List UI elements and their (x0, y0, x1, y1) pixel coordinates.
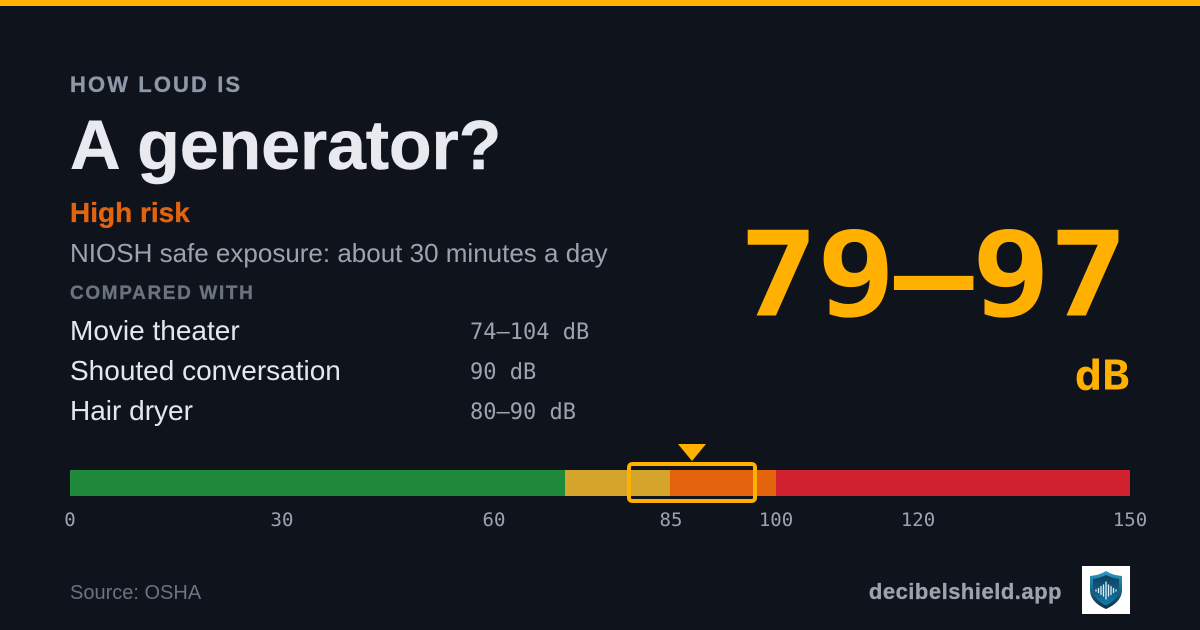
decibel scale bar (70, 470, 1130, 496)
marker triangle (678, 444, 706, 461)
scale tick labels (64, 509, 1147, 531)
source: Source: OSHA (70, 582, 201, 604)
icon: shield logo (1082, 566, 1130, 614)
risk label: High risk (70, 197, 190, 228)
comparison: movie theater: Movie theater (70, 315, 240, 346)
big decibel value: 79–97 (739, 207, 1126, 344)
eyebrow heading: HOW LOUD IS (70, 72, 242, 97)
comparison heading: COMPARED WITH (70, 283, 254, 304)
comparison: hair dryer: 80–90 dB (470, 400, 576, 425)
comparison: hair dryer (70, 395, 576, 426)
comparison: movie theater (70, 315, 589, 346)
scale tick labels: 150 (1113, 509, 1147, 531)
site name: decibelshield.app (869, 579, 1062, 604)
comparison: shouted conversation: 90 dB (470, 360, 536, 385)
scale tick labels: 100 (759, 509, 793, 531)
comparison: shouted conversation (70, 355, 536, 386)
scale tick labels: 60 (483, 509, 505, 531)
scale tick labels: 85 (660, 509, 682, 531)
exposure note: NIOSH safe exposure: about 30 minutes a day (70, 238, 608, 268)
scale tick labels: 30 (271, 509, 293, 531)
comparison: hair dryer: Hair dryer (70, 395, 193, 426)
comparison: shouted conversation: Shouted conversation (70, 355, 341, 386)
scale tick labels: 120 (901, 509, 935, 531)
range bracket (627, 462, 757, 503)
comparison: movie theater: 74–104 dB (470, 320, 589, 345)
decibel unit: dB (1075, 351, 1130, 399)
title: A generator? (70, 106, 501, 184)
top accent bar (0, 0, 1200, 6)
scale tick labels: 0 (64, 509, 76, 531)
